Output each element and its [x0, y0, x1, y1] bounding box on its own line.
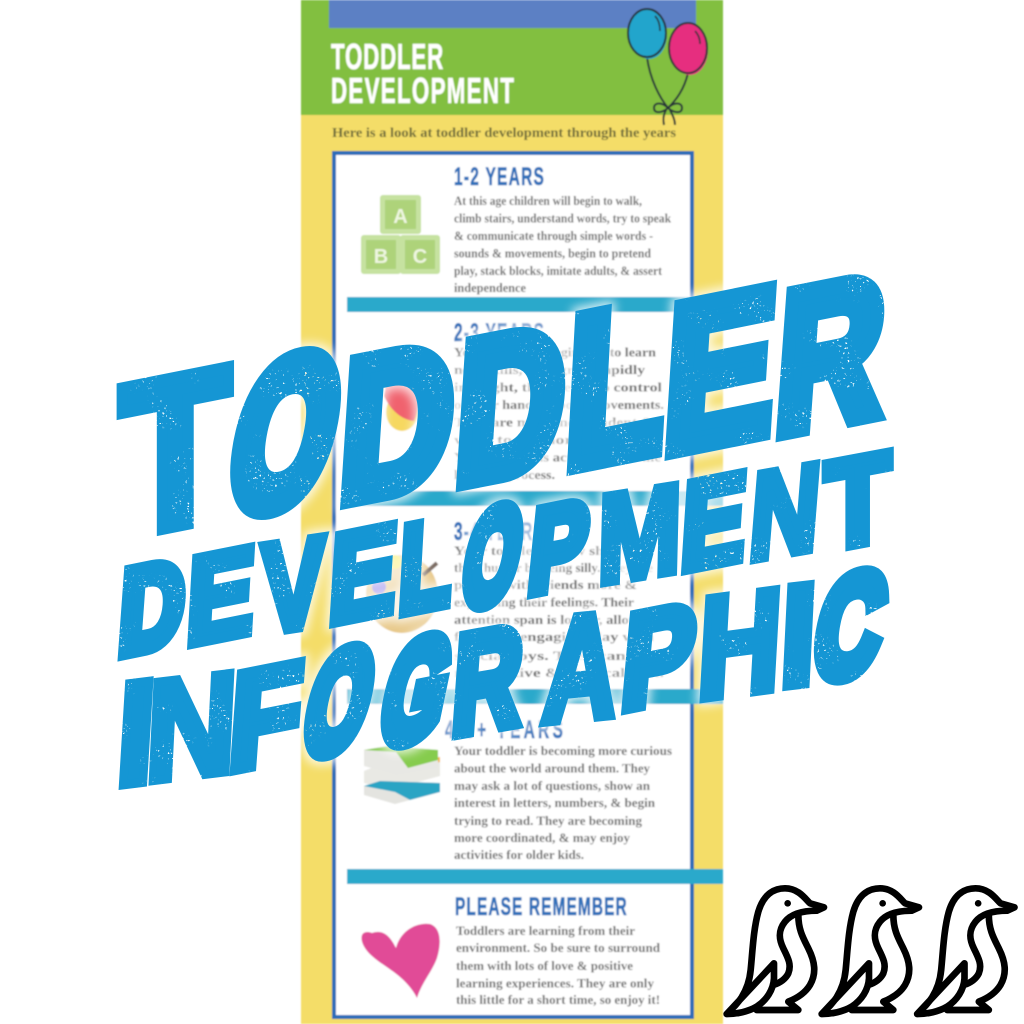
- section: please remember: [362, 893, 661, 1007]
- icon: balloons: [628, 9, 708, 125]
- body text: more active & physically fit.: [454, 665, 664, 680]
- title line 3: H: [694, 558, 786, 730]
- title line 3: [112, 540, 897, 818]
- title line 1: T: [120, 322, 231, 583]
- body text: this little for a short time, so enjoy it!: [456, 992, 660, 1007]
- heading: PLEASE REMEMBER: [455, 893, 627, 921]
- body text: [454, 543, 664, 680]
- title line 3: P: [616, 575, 701, 740]
- body text: in height, they begin to control: [454, 380, 662, 394]
- body text: trying to read. They are becoming: [454, 813, 642, 828]
- body text: for more engaging play with: [454, 629, 655, 644]
- title line 3: R: [448, 595, 528, 765]
- body text: attention span is longer, allowing: [454, 612, 660, 627]
- title line 3: G: [368, 604, 464, 777]
- body text: special toys. They can be: [454, 648, 649, 663]
- title line 2: L: [396, 490, 456, 641]
- body text: environment. So be sure to surround: [456, 940, 661, 955]
- title line 2: N: [745, 435, 825, 588]
- section: 4-5+ years: [364, 716, 672, 862]
- section: 1-2 years: [361, 163, 672, 295]
- section: 3-4 years: [366, 518, 664, 680]
- body text: want to do more activities.: [454, 432, 658, 447]
- title line 3: A: [539, 581, 623, 753]
- body text: Your toddler is becoming more curious: [454, 743, 672, 758]
- icon: penguin 3: [917, 888, 1014, 1014]
- body text: [456, 923, 661, 1007]
- penguin icons row: [727, 888, 1014, 1014]
- body text: them with lots of love & positive: [456, 958, 633, 973]
- icon: ball: [384, 376, 418, 431]
- title line 2: D: [115, 534, 189, 681]
- body text: learning experiences. They are only: [456, 976, 654, 990]
- body text: & communicate through simple words -: [454, 228, 653, 243]
- icon: ABC blocks: A: [393, 206, 408, 228]
- title line 2: P: [523, 476, 594, 620]
- title line 1: R: [770, 233, 891, 477]
- icon: ABC blocks: [361, 195, 440, 274]
- title line 2: E: [677, 445, 750, 598]
- body text: sounds & movements, begin to pretend: [454, 246, 652, 260]
- body text: At this age children will begin to walk,: [454, 193, 642, 208]
- title line 2: O: [453, 476, 532, 638]
- title line 1: D: [334, 301, 461, 545]
- icon: paint palette: [366, 555, 438, 633]
- subtitle: Here is a look at toddler development through the years: [332, 126, 677, 141]
- body text: learning process.: [454, 467, 555, 482]
- poster heading: [331, 38, 514, 111]
- icon: penguin 1: [727, 888, 824, 1014]
- title line 1: D: [450, 282, 572, 527]
- body text: their humor by being silly. They are: [454, 560, 653, 575]
- title line 1: E: [658, 244, 782, 498]
- white card with blue border: [334, 153, 692, 1017]
- body text: [454, 743, 672, 862]
- title line 2: [115, 425, 890, 681]
- title line 3: F: [225, 633, 307, 801]
- body text: of their hands & body movements.: [454, 397, 664, 412]
- body text: play, stack blocks, imitate adults, & assert: [454, 263, 663, 278]
- title line 1: [120, 233, 891, 583]
- body text: playing with friends more &: [454, 577, 637, 592]
- body text: activities for older kids.: [454, 847, 584, 862]
- body text: climb stairs, understand words, try to speak: [454, 210, 672, 226]
- icon: ABC blocks: C: [413, 246, 427, 268]
- icon: penguin 2: [822, 888, 919, 1014]
- title line 1: O: [214, 305, 358, 560]
- body text: expressing their feelings. Their: [454, 594, 634, 610]
- title line 3: C: [804, 540, 897, 711]
- heading: 4-5+ YEARS: [445, 716, 563, 744]
- heading: 2-3 YEARS: [454, 319, 544, 347]
- poster heading: TODDLER: [331, 38, 443, 77]
- title line 3: I: [776, 553, 820, 718]
- heading: 3-4 YEARS: [454, 518, 544, 546]
- blue top bar: [329, 0, 696, 28]
- title line 3: O: [291, 615, 387, 788]
- title line 2: M: [596, 458, 683, 612]
- body text: Your toddler is beginning to learn: [454, 344, 657, 360]
- body text: interest in letters, numbers, & begin: [454, 795, 656, 810]
- heading: 1-2 YEARS: [454, 163, 544, 191]
- title line 2: E: [325, 498, 401, 651]
- icon: heart: [362, 924, 440, 998]
- overlay title: toddler development infographic: [112, 233, 897, 818]
- infographic poster: [301, 0, 723, 1024]
- yellow page background: [301, 0, 723, 1024]
- body text: [454, 193, 672, 295]
- poster heading: DEVELOPMENT: [331, 72, 514, 111]
- title line 2: T: [825, 425, 890, 577]
- teal divider bars: [347, 297, 723, 884]
- icon: stack of books: [364, 746, 440, 804]
- title line 2: E: [183, 521, 258, 672]
- body text: They are more independent &: [454, 414, 654, 430]
- body text: independence: [454, 280, 526, 295]
- body text: [454, 344, 664, 482]
- title line 3: I: [112, 649, 160, 818]
- body text: Your toddler is active part of the: [454, 450, 661, 464]
- title line 2: V: [262, 510, 325, 660]
- body text: more coordinated, & may enjoy: [454, 830, 630, 845]
- title line 3: N: [143, 640, 241, 813]
- body text: new skills, they grow rapidly: [454, 362, 646, 377]
- body text: may ask a lot of questions, show an: [454, 778, 651, 793]
- title line 1: L: [561, 256, 671, 514]
- green header band: [301, 0, 723, 115]
- body text: Your toddler is now showing: [454, 543, 645, 558]
- body text: about the world around them. They: [454, 760, 650, 776]
- icon: ABC blocks: B: [374, 246, 388, 268]
- section: 2-3 years: [384, 319, 664, 482]
- body text: Toddlers are learning from their: [456, 923, 635, 938]
